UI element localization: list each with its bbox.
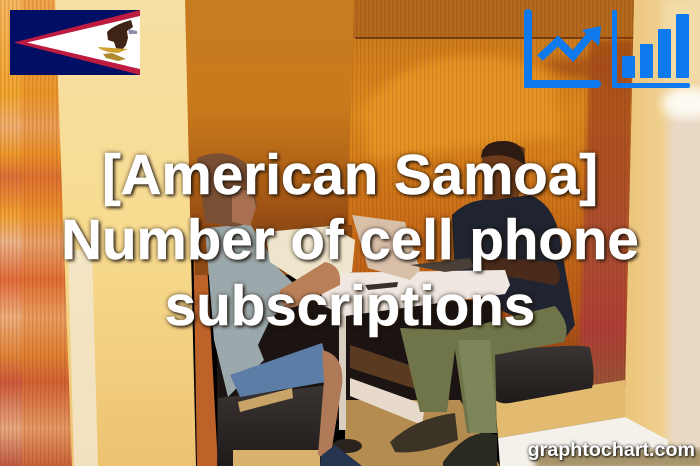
person right: head bbox=[481, 141, 525, 200]
title: Number of cell phone bbox=[61, 208, 639, 271]
title: subscriptions bbox=[165, 274, 535, 337]
person left: arm bbox=[280, 262, 340, 308]
person left: shoe bbox=[320, 445, 362, 466]
person right: trousers bbox=[400, 306, 567, 433]
person left: head bbox=[197, 153, 257, 227]
brown behind left person bbox=[195, 225, 352, 275]
papers on the table bbox=[265, 226, 355, 282]
person left: shirt bbox=[205, 224, 300, 397]
title: [American Samoa] bbox=[102, 143, 598, 206]
laptop bbox=[352, 215, 420, 280]
website brand text: graphtochart.com bbox=[528, 439, 695, 461]
person right: shoes bbox=[390, 413, 497, 466]
person right: dark shirt bbox=[452, 195, 575, 338]
table pedestal bbox=[332, 300, 362, 453]
bench seat right bbox=[490, 346, 594, 403]
dark area behind the sitters bbox=[217, 300, 497, 420]
tablet and phone on table bbox=[365, 258, 475, 290]
person right: forearm bbox=[473, 256, 560, 285]
left cream column bbox=[55, 0, 196, 466]
icon: line chart bbox=[528, 13, 601, 84]
right cream wall bbox=[625, 0, 700, 466]
flag of American Samoa bbox=[10, 10, 140, 75]
person left: shorts bbox=[230, 343, 327, 397]
right patterned wall bbox=[343, 0, 634, 390]
person left: lower leg bbox=[318, 350, 342, 460]
left striped panel edge bbox=[193, 225, 218, 466]
title bbox=[61, 143, 642, 338]
bench seat left bbox=[217, 385, 333, 466]
upper brown panel bbox=[184, 0, 360, 240]
floor and ledge bbox=[345, 345, 700, 466]
left patterned wall bbox=[0, 0, 75, 466]
table top bbox=[320, 270, 510, 316]
icon: bar chart bbox=[612, 10, 690, 88]
